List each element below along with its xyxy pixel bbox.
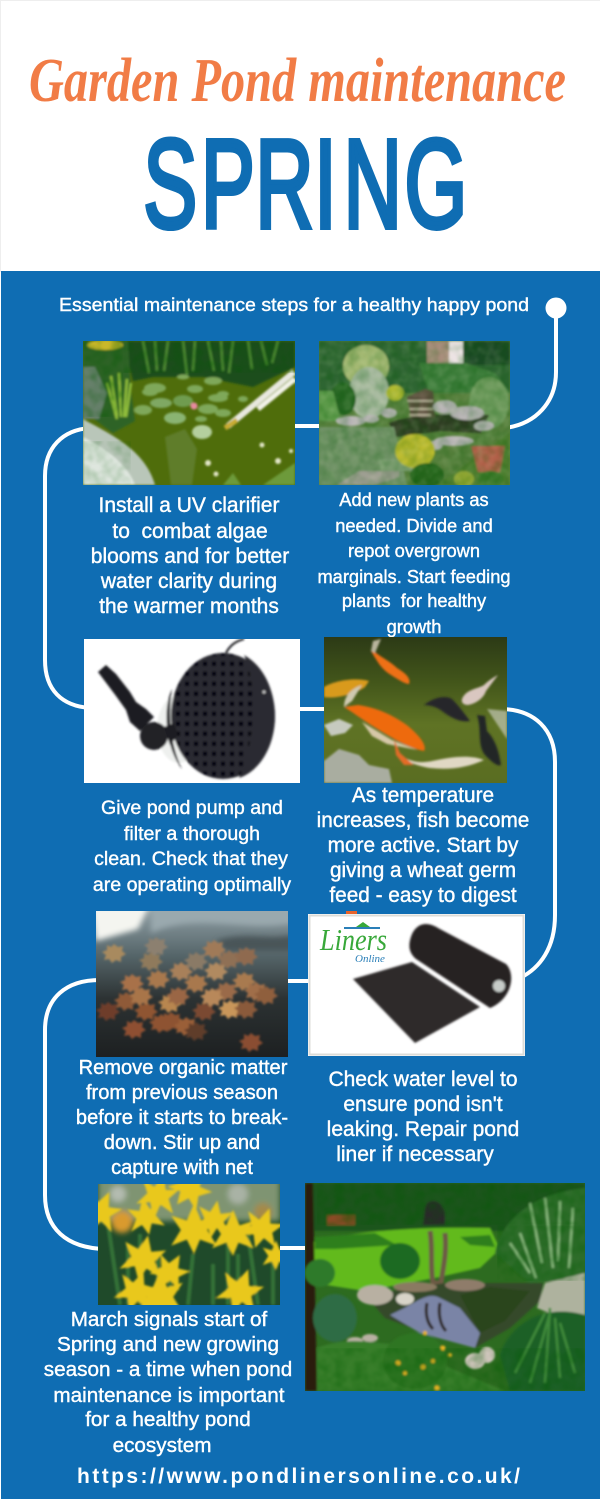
text: UV clarifier: water clarity during — [100, 570, 277, 593]
text: add new plants — [317, 489, 511, 637]
text: March signals: maintenance is important — [53, 1384, 285, 1407]
text: add new plants: plants for healthy — [342, 590, 487, 611]
photo: koi fish — [324, 637, 507, 783]
text: check water level: ensure pond isn't — [343, 1093, 503, 1116]
connector timeline — [45, 298, 566, 1249]
text: add new plants: needed. Divide and — [335, 515, 493, 536]
website url: https://www.pondlinersonline.co.uk/ — [77, 1465, 520, 1488]
text: add new plants: marginals. Start feeding — [317, 566, 511, 587]
photo: lily pond — [83, 341, 295, 485]
photo: pond pump — [84, 639, 300, 783]
text: pump and filter: clean. Check that they — [94, 848, 288, 870]
text: add new plants: repot overgrown — [348, 540, 480, 561]
text: UV clarifier: the warmer months — [99, 595, 279, 618]
text: March signals: Spring and new growing — [57, 1333, 279, 1356]
text: feed fish: increases, fish become — [317, 809, 529, 832]
text: remove organic matter — [76, 1057, 288, 1179]
text: remove organic matter: Remove organic matter — [79, 1057, 288, 1079]
logo: Liners Online: Online — [355, 953, 385, 965]
text: feed fish: more active. Start by — [328, 834, 519, 857]
photo: leaves on water — [96, 911, 288, 1057]
text: March signals: season - a time when pond — [44, 1358, 292, 1381]
text: remove organic matter: capture with net — [111, 1157, 253, 1179]
text: feed fish: feed - easy to digest — [329, 884, 517, 907]
heading: SPRING: SPRING — [143, 114, 467, 255]
text: March signals: ecosystem — [113, 1434, 211, 1457]
text: remove organic matter: from previous season — [86, 1082, 278, 1104]
photo: daffodils — [98, 1184, 280, 1305]
text: check water level: Check water level to — [328, 1068, 518, 1091]
text: check water level: leaking. Repair pond — [327, 1118, 519, 1141]
text: UV clarifier: to combat algae — [112, 520, 268, 543]
text: UV clarifier: Install a UV clarifier — [99, 494, 279, 517]
text: feed fish: giving a wheat germ — [330, 859, 516, 882]
text: add new plants: Add new plants as — [339, 489, 489, 510]
text: UV clarifier: blooms and for better — [91, 545, 289, 568]
photo: garden pond — [305, 1183, 585, 1391]
logo: Liners Online: Liners — [319, 922, 387, 957]
text: March signals — [44, 1308, 292, 1457]
text: pump and filter: filter a thorough — [124, 823, 260, 845]
text: pump and filter — [93, 797, 291, 896]
photo: pond liner roll — [308, 914, 525, 1056]
text: UV clarifier — [91, 494, 289, 618]
intro text: Essential maintenance steps for a healthy happy pond — [59, 294, 529, 315]
text: March signals: for a healthy pond — [85, 1408, 251, 1431]
text: pump and filter: are operating optimally — [93, 874, 291, 896]
text: check water level — [327, 1068, 519, 1166]
text: remove organic matter: down. Stir up and — [104, 1132, 260, 1154]
text: add new plants: growth — [387, 616, 441, 637]
text: remove organic matter: before it starts to break- — [76, 1107, 288, 1129]
text: check water level: liner if necessary — [336, 1143, 494, 1166]
text: feed fish — [317, 784, 529, 907]
text: March signals: March signals start of — [71, 1308, 268, 1331]
decorative orange mark — [346, 911, 357, 914]
text: feed fish: As temperature — [352, 784, 494, 807]
text: pump and filter: Give pond pump and — [101, 797, 283, 819]
photo: garden rockery — [319, 341, 510, 485]
